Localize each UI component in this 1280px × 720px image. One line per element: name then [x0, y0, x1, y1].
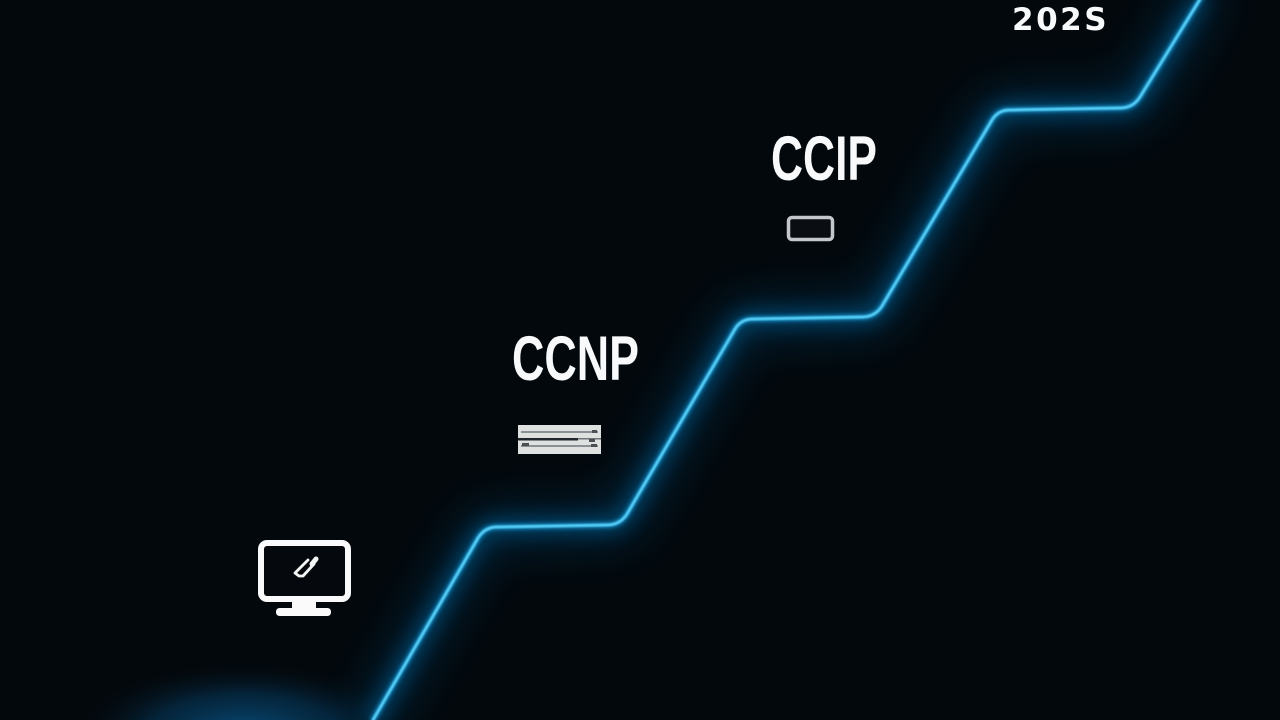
icon: computer monitor	[261, 543, 348, 616]
bottom-left blue glow	[60, 640, 420, 720]
label: 202S: 202S	[1012, 2, 1109, 38]
icon: server rack	[518, 425, 601, 454]
glowing stepped line	[373, 0, 1202, 720]
icon: small rectangle	[788, 218, 832, 240]
label: CCNP: CCNP	[512, 324, 639, 394]
label: CCIP: CCIP	[771, 124, 877, 194]
icon detail: pencil glyph	[295, 559, 316, 576]
